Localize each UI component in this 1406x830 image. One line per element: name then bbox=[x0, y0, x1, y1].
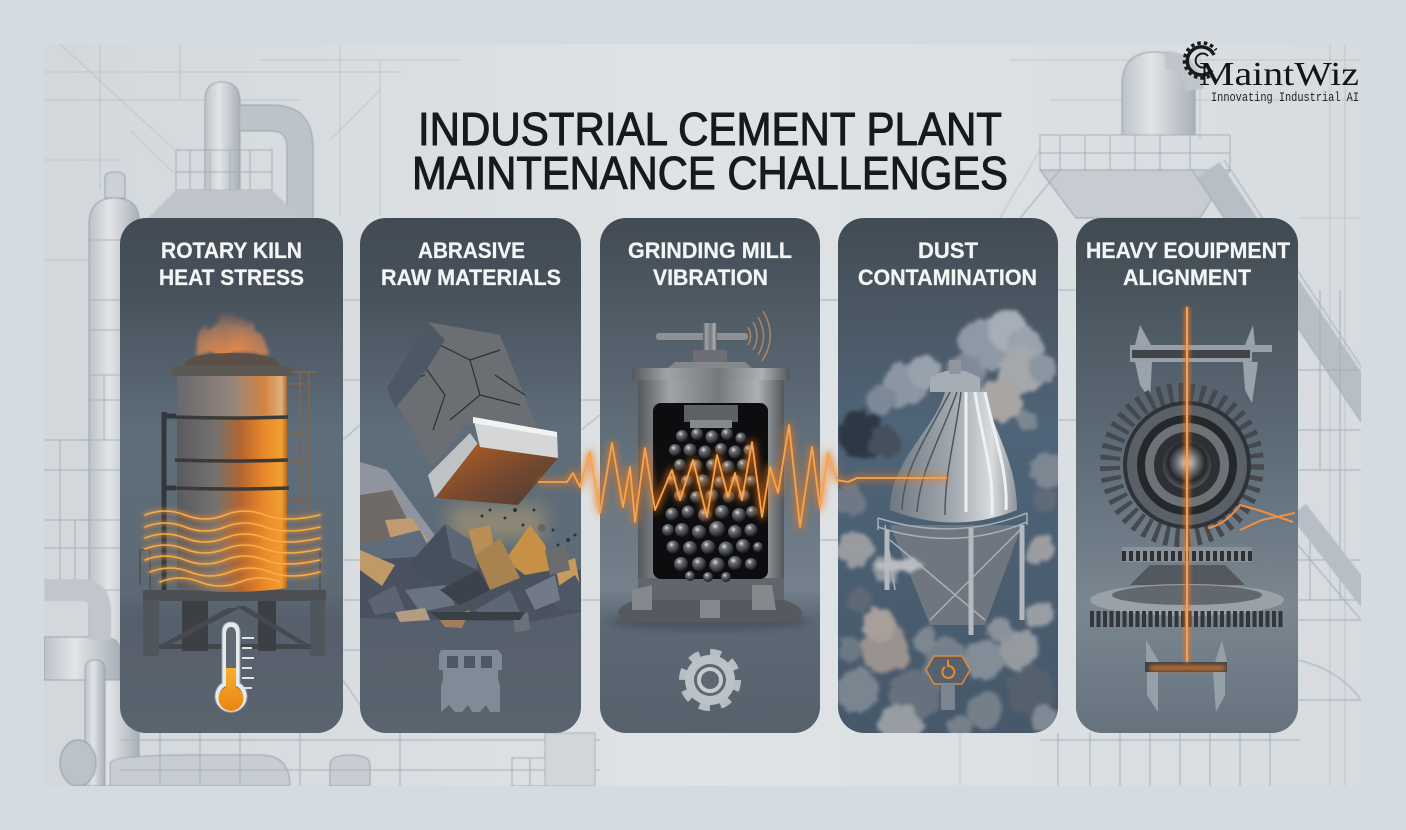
heading: heavy equipment bbox=[1087, 242, 1290, 286]
heading: dust: DUST bbox=[918, 238, 978, 263]
grinding balls bbox=[662, 428, 763, 582]
icon: crusher teeth bbox=[439, 650, 502, 712]
heading: heavy equipment: ALIGNMENT bbox=[1123, 265, 1251, 290]
logo: MaintWiz: MaintWiz bbox=[1199, 56, 1359, 93]
crusher block bbox=[387, 322, 558, 505]
lower gears bbox=[1090, 547, 1285, 619]
heading: grinding mill: VIBRATION bbox=[653, 265, 768, 290]
rock pile bbox=[360, 462, 581, 632]
large gear bbox=[1110, 393, 1254, 537]
heading: grinding mill bbox=[628, 242, 792, 286]
heading: abrasive: ABRASIVE bbox=[418, 238, 525, 263]
kiln body bbox=[177, 418, 287, 592]
silo bbox=[878, 360, 1027, 635]
falling rock debris bbox=[480, 508, 576, 546]
panel: dust contamination bbox=[834, 218, 1066, 747]
title: MAINTENANCE CHALLENGES bbox=[412, 147, 1008, 199]
heading: rotary kiln: ROTARY KILN bbox=[161, 238, 302, 263]
heading: dust: CONTAMINATION bbox=[858, 265, 1037, 290]
heading: rotary kiln: HEAT STRESS bbox=[159, 265, 304, 290]
top caliper bbox=[1130, 325, 1272, 403]
heading: abrasive bbox=[382, 242, 560, 286]
bottom caliper bbox=[1145, 640, 1227, 712]
logo: MaintWiz bbox=[1184, 43, 1359, 105]
heading: grinding mill: GRINDING MILL bbox=[628, 238, 792, 263]
icon: dust filter bbox=[926, 656, 970, 710]
heading: heavy equipment: HEAVY EOUIPMENT bbox=[1086, 238, 1290, 263]
icon: gear bbox=[683, 653, 737, 707]
side pipe bbox=[162, 412, 176, 590]
panel: heavy equipment alignment bbox=[1076, 218, 1298, 733]
blueprint background: left plant structures bbox=[44, 44, 1076, 786]
flames bbox=[194, 310, 268, 354]
dust clouds behind silo bbox=[834, 310, 1066, 582]
alignment laser lines bbox=[1150, 307, 1295, 668]
logo: MaintWiz: Innovating Industrial AI bbox=[1211, 91, 1359, 105]
heading: rotary kiln bbox=[160, 242, 304, 286]
dust clouds in front of silo bbox=[836, 560, 1059, 747]
panel: rotary kiln heat stress bbox=[120, 218, 343, 733]
vibration signal line bbox=[538, 425, 947, 527]
icon: thermometer bbox=[215, 622, 254, 712]
heat waves bbox=[145, 511, 320, 586]
ladder bbox=[288, 372, 318, 590]
grinding mill bbox=[610, 323, 810, 630]
icon: vibration arcs bbox=[748, 311, 770, 361]
title: INDUSTRIAL CEMENT PLANT bbox=[418, 103, 1002, 155]
panel: grinding mill vibration bbox=[600, 218, 820, 733]
kiln structure support bbox=[140, 550, 326, 656]
heading: abrasive: RAW MATERIALS bbox=[381, 265, 561, 290]
blueprint background: right plant structures bbox=[960, 44, 1380, 786]
panel: abrasive raw materials bbox=[360, 218, 581, 733]
heading: dust bbox=[858, 242, 1036, 286]
title bbox=[412, 103, 1008, 199]
